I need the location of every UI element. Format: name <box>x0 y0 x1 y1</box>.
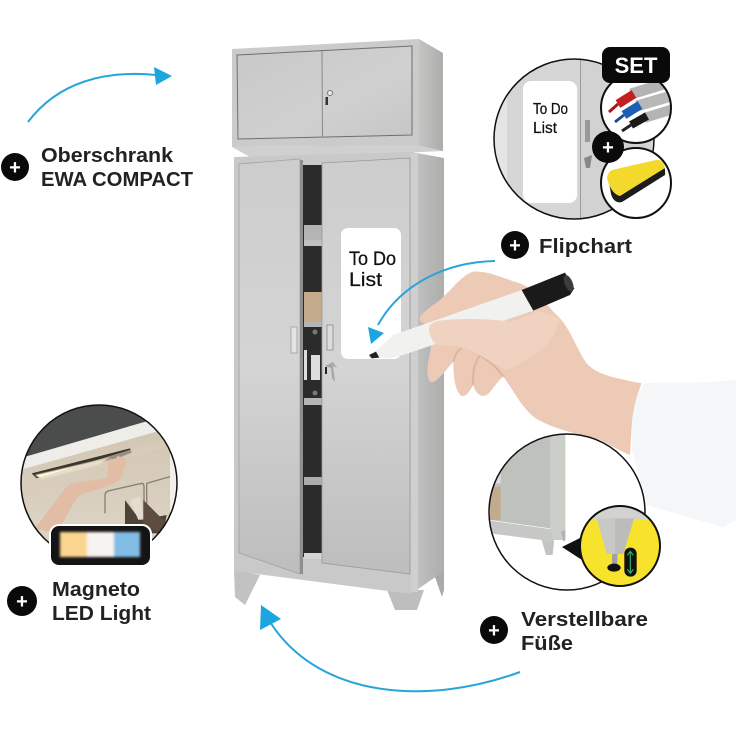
plus icon: Magneto <box>7 586 37 616</box>
cabinet legs <box>234 560 444 610</box>
lock <box>326 90 332 105</box>
plus icon: Oberschrank <box>1 153 29 181</box>
marker <box>369 273 576 358</box>
cabinet interior <box>302 165 323 559</box>
lower cabinet <box>234 152 444 610</box>
marker set circle <box>600 83 672 144</box>
arrow: to feet <box>260 605 520 691</box>
LED light circle <box>20 404 178 544</box>
arrow: to upper cabinet <box>28 67 172 122</box>
plus icon: Verstellbare Füße <box>480 616 508 644</box>
label: Magneto LED Light: Magneto <box>52 579 140 601</box>
label: Oberschrank: EWA COMPACT <box>41 169 193 191</box>
label: Verstellbare Füße: Füße <box>521 633 573 655</box>
plus between flipchart accessories: + <box>602 137 614 159</box>
arrow: to flipchart <box>368 261 495 344</box>
yellow foot detail circle <box>577 505 660 586</box>
SET badge: SET <box>615 53 658 78</box>
plus icon: Flipchart: + <box>509 235 521 257</box>
upper cabinet <box>232 39 443 157</box>
hand and marker <box>369 271 642 455</box>
hand <box>420 271 642 455</box>
whiteboard with handwriting: List <box>349 270 383 291</box>
sleeve <box>632 380 736 527</box>
label: Verstellbare Füße: Verstellbare <box>521 609 648 631</box>
pointer triangle <box>562 537 582 560</box>
flipchart circle: List <box>533 120 558 137</box>
plus icon: Oberschrank: + <box>9 157 21 179</box>
flipchart circle <box>494 59 654 219</box>
label: Flipchart: Flipchart <box>539 236 632 258</box>
plus between flipchart accessories <box>592 131 624 163</box>
SET badge <box>602 47 670 83</box>
plus icon: Magneto: + <box>16 591 28 613</box>
right door <box>322 158 410 574</box>
flipchart circle: To Do <box>533 101 568 118</box>
label: Oberschrank: Oberschrank <box>41 145 174 167</box>
whiteboard with handwriting <box>341 228 401 359</box>
thumb <box>429 312 560 370</box>
arm <box>35 456 126 533</box>
label: Magneto LED Light: LED Light <box>52 603 151 625</box>
plus icon: Flipchart <box>501 231 529 259</box>
left door <box>239 159 303 574</box>
adjustable feet circle <box>489 433 645 590</box>
sponge circle <box>601 148 671 218</box>
whiteboard with handwriting: To Do <box>349 249 396 270</box>
LED colour temperature badge <box>50 525 151 566</box>
plus icon: Verstellbare Füße: + <box>488 620 500 642</box>
